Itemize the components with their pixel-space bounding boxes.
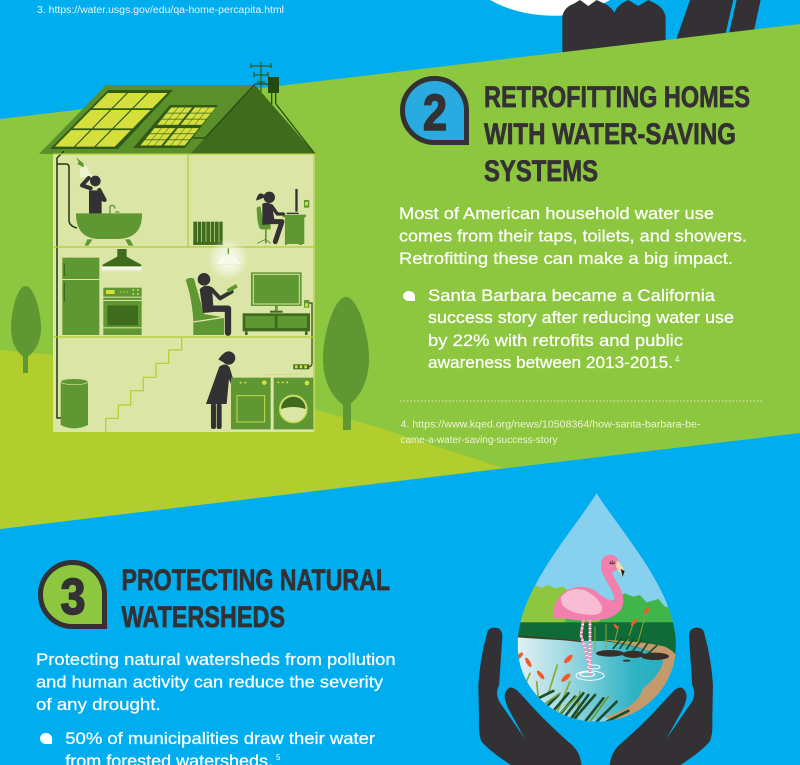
lower rooms (61, 239, 313, 429)
section 2 bullet text: success story after reducing water use (428, 308, 734, 327)
footnote 4 (400, 420, 700, 446)
section 3 intro text: and human activity can reduce the severity (36, 673, 384, 692)
tv console (243, 313, 310, 335)
heading 3: WATERSHEDS (122, 601, 285, 634)
television (251, 272, 302, 313)
sand (603, 640, 678, 723)
tree left (11, 286, 41, 373)
section 2 intro text (399, 204, 747, 268)
fridge (62, 258, 99, 335)
room dividers (53, 154, 315, 432)
lime ground (0, 350, 503, 529)
water pipes (57, 151, 77, 418)
power strip (263, 364, 309, 378)
bullet icon (403, 291, 415, 301)
foreground cattails (518, 652, 573, 682)
washing machine (274, 378, 313, 429)
radiator (193, 222, 223, 245)
foreground grass (525, 665, 628, 722)
section 2 bullet text: Santa Barbara became a California (428, 286, 716, 305)
oven (103, 288, 142, 335)
section 2 (399, 78, 762, 446)
radiator base (193, 242, 223, 245)
bathtub feet (85, 239, 133, 246)
desk (283, 215, 306, 244)
large solar panel (50, 90, 173, 149)
water (513, 637, 663, 725)
footnote 3: 3. https://water.usgs.gov/edu/qa-home-percapita.html (37, 5, 284, 16)
badge 2 (402, 78, 466, 142)
eye (609, 560, 615, 564)
bathtub (76, 205, 142, 239)
chair base (257, 239, 271, 243)
dark green bank (513, 622, 680, 662)
office chair (257, 207, 271, 243)
illustration: hand cropped at top (490, 0, 761, 57)
bathroom and office (76, 157, 309, 245)
section 3 (36, 562, 396, 765)
right hand (610, 628, 713, 765)
back reeds (595, 611, 657, 653)
hills left (520, 585, 600, 625)
section 2 intro text: Retrofitting these can make a big impact. (399, 249, 733, 268)
ripples (576, 665, 604, 680)
person showering (82, 176, 105, 213)
house walls (53, 154, 315, 432)
heading 2 (484, 81, 750, 188)
remote control (227, 284, 238, 293)
roof gable (190, 85, 315, 154)
section 3 bullet text: 50% of municipalities draw their water (65, 729, 375, 748)
section 3 intro text (36, 650, 396, 714)
antenna (251, 62, 271, 92)
woman doing laundry (206, 351, 241, 429)
bullet icon (40, 733, 52, 744)
footnote 4: 4. https://www.kqed.org/news/10508364/how-santa-barbara-be- (400, 420, 700, 430)
heading 3 (122, 564, 390, 634)
wiring (193, 84, 315, 367)
heading 2: WITH WATER-SAVING (484, 118, 736, 151)
roof (39, 85, 315, 154)
neck (605, 568, 619, 608)
wall outlet (304, 200, 309, 208)
badge 3: 3 (60, 568, 86, 625)
shower (76, 157, 92, 177)
section 2 bullet text: awareness between 2013-2015. (428, 353, 673, 372)
green band background (0, 24, 800, 529)
house illustration (39, 62, 315, 432)
computer monitor (287, 189, 299, 214)
head (601, 555, 619, 573)
tv wall outlet (304, 300, 309, 308)
flamingo (553, 555, 625, 675)
section 3 bullet text: 5 (276, 753, 281, 762)
woman at desk (256, 192, 283, 242)
small solar panel (133, 105, 218, 148)
tree right (323, 297, 369, 430)
junction box (268, 77, 279, 104)
armchair (186, 278, 224, 335)
person watching tv (198, 273, 232, 333)
section 2 bullet text (428, 286, 734, 372)
range hood (102, 249, 142, 273)
sky (513, 492, 680, 725)
section 2 intro text: comes from their taps, toilets, and showers. (399, 226, 747, 246)
hills right (597, 593, 680, 625)
section 3 bullet text (65, 729, 375, 765)
back cattails (613, 606, 651, 630)
badge 3 (40, 562, 104, 626)
section 2 bullet text: 4 (675, 355, 680, 364)
desk legs (285, 240, 302, 245)
heading 3: PROTECTING NATURAL (122, 564, 390, 597)
section 3 intro text: Protecting natural watersheds from pollution (36, 650, 396, 669)
section 2 intro text: Most of American household water use (399, 204, 714, 223)
trash bin (61, 379, 88, 428)
badge 2: 2 (423, 84, 447, 141)
dryer (231, 378, 271, 429)
ceiling lamp (208, 239, 249, 280)
wing (561, 589, 602, 615)
left hand (478, 628, 582, 765)
footnote 4: came-a-water-saving-success-story (400, 435, 558, 446)
beak (616, 560, 625, 577)
water drop scene (513, 492, 680, 725)
mud mounds (596, 650, 669, 662)
section 3 intro text: of any drought. (36, 695, 161, 714)
legs (581, 620, 590, 675)
section 2 bullet text: by 22% with retrofits and public (428, 331, 684, 350)
heading 2: SYSTEMS (484, 155, 598, 188)
illustration: water drop held by hands (478, 492, 713, 765)
body (553, 587, 623, 621)
